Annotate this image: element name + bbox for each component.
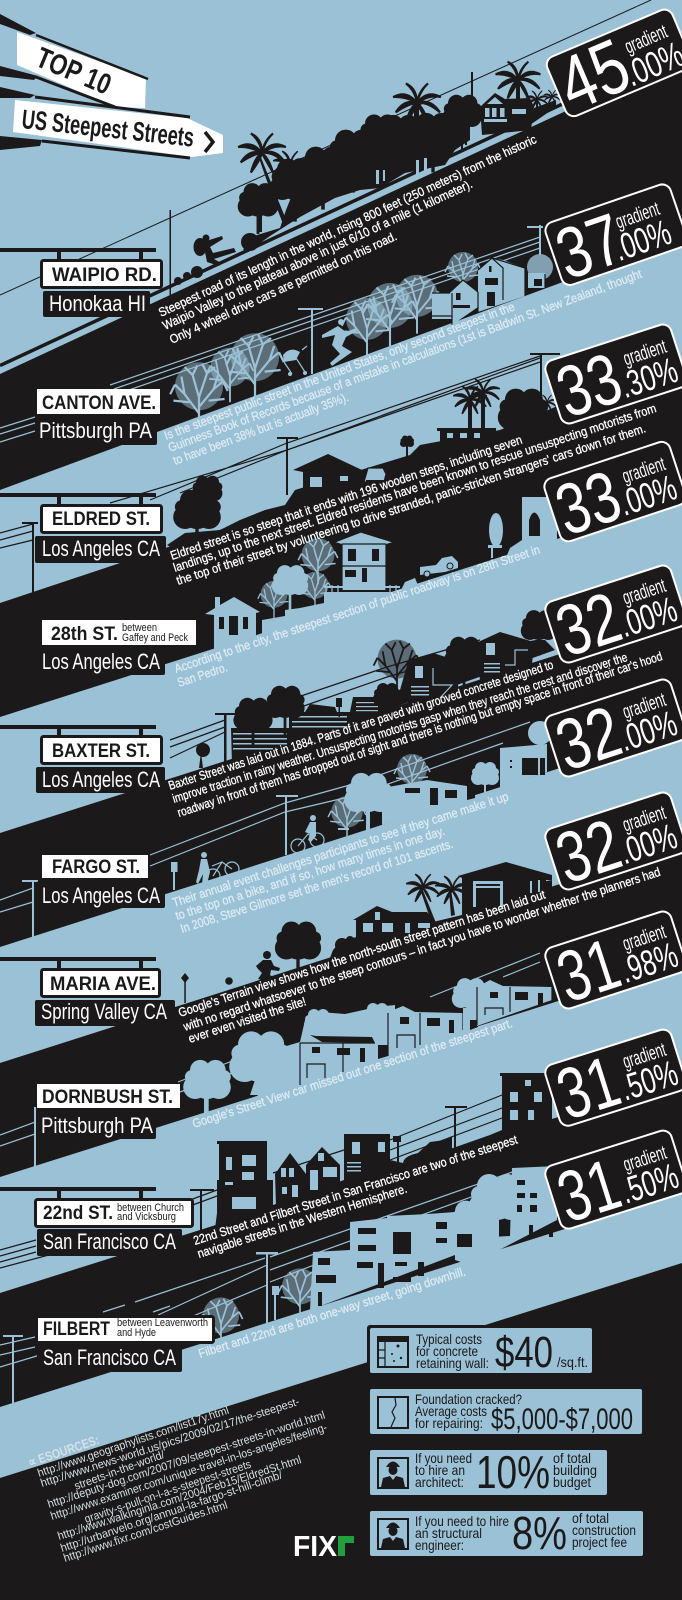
cost box: structural engineer: of total — [572, 1510, 609, 1526]
cost box: retaining wall: for concrete — [416, 1343, 478, 1359]
icon: blue houses — [432, 258, 545, 325]
sign: 28th St: Gaffey and Peck — [122, 632, 188, 644]
sign: Baxter St: BAXTER ST. — [52, 741, 150, 762]
sign: 28th St — [38, 620, 196, 675]
icon: hillside house right — [476, 632, 534, 690]
resources list — [26, 1396, 329, 1565]
text: Filbert description: Filbert and 22nd are both one-way street, going downhill. — [197, 1265, 467, 1361]
scene: Dornbush St tree-lined houses — [0, 953, 552, 1167]
cost box: retaining wall: /sq.ft. — [557, 1354, 588, 1370]
sign: 22nd St: between Church — [117, 1202, 184, 1214]
text: Eldred description: Eldred street is so steep that it ends with 196 wooden steps, including seven — [169, 433, 524, 563]
resources list: http://urbanvelo.org/annual-la-fargo-st-hill-climb/ — [59, 1469, 285, 1555]
band: footer black slope — [0, 1263, 682, 1600]
logo: Fixr: FIX — [293, 1531, 338, 1563]
badge: 33.00% gradient — [541, 436, 682, 553]
title sign: US Steepest Streets: US Steepest Streets — [20, 104, 196, 153]
text: 22nd St description: navigable streets in the Western Hemisphere. — [196, 1182, 409, 1261]
badge: 33.00% gradient: 33 — [546, 456, 630, 551]
icon: Dornbush house one — [300, 1035, 375, 1088]
text: Baxter description: Baxter Street was laid out in 1884. Parts of it are paved with grooved concrete designed to — [167, 658, 555, 793]
sign: 28th St: between — [122, 622, 157, 634]
text: Maria description: Google's Terrain view shows how the north-south street pattern has been laid out — [177, 887, 548, 1020]
scene: Eldred St trees, poles, houses and car — [0, 353, 560, 594]
icon: running child — [256, 951, 280, 983]
cost box: architect: to hire an — [415, 1462, 465, 1478]
sign: Waipio Rd — [0, 248, 162, 317]
icon: cyclist riding — [291, 815, 324, 853]
badge: 31.50% gradient for 22nd: 31 — [548, 1144, 630, 1238]
icon: cracked foundation — [378, 1397, 408, 1428]
cost box: retaining wall: retaining wall: — [416, 1355, 489, 1371]
sign: Filbert: between Leavenworth — [117, 1317, 208, 1329]
cost box: architect: building — [553, 1462, 597, 1478]
sign: Eldred St — [0, 493, 166, 563]
band: Waipio and Canton black slope — [0, 57, 682, 490]
sign: Maria Ave — [0, 957, 175, 1026]
sign: Fargo St: Los Angeles CA — [42, 883, 160, 908]
text: Waipio description: Steepest road of its length in the world, rising 800 feet (250 meters) from the historic — [156, 132, 539, 320]
sign: Waipio Rd: WAIPIO RD. — [52, 265, 157, 286]
badge: 31.50% gradient for 22nd — [542, 1124, 682, 1240]
icon: flat-roof house — [437, 428, 496, 449]
text: 22nd St description: 22nd Street and Filbert Street in San Francisco are two of the steepest — [192, 1132, 520, 1248]
sign: Baxter St — [0, 725, 165, 793]
badge: 31.50% gradient for Dornbush: 31 — [548, 1041, 629, 1135]
sign: Filbert — [36, 1316, 214, 1372]
badge: 33.30% gradient: 33 — [547, 338, 631, 433]
title sign: TOP 10 — [0, 14, 148, 108]
title sign: US Steepest Streets — [0, 87, 223, 158]
sign: Baxter St: Los Angeles CA — [42, 767, 160, 792]
sign: Waipio Rd: Honokaa HI — [49, 291, 146, 316]
icon: hiker — [194, 234, 236, 266]
icon: Victorian building — [217, 1141, 273, 1214]
scene: 22nd St Victorian row houses and car — [0, 1073, 552, 1268]
icon: engineer — [378, 1519, 408, 1549]
cost box: structural engineer — [370, 1507, 643, 1559]
sign: Filbert: FILBERT — [43, 1319, 110, 1340]
icon: flat house — [344, 1134, 390, 1176]
text: 28th St description: San Pedro. — [176, 660, 229, 690]
icon: tall house — [500, 1073, 552, 1138]
sign: 22nd St: San Francisco CA — [43, 1229, 176, 1254]
text: Dornbush description: Google's Street View car missed out one section of the steepest part. — [191, 1016, 514, 1131]
text: Fargo description: In 2008, Steve Gilmore set the men's record of 101 ascents. — [179, 837, 455, 936]
resources list: http://www.fixr.com/costGuides.html — [62, 1499, 229, 1565]
cost box: architect: budget — [553, 1474, 591, 1490]
text: Waipio description: Waipio Valley to the plateau above in just 6/10 of a mile (1 kilometer). — [160, 177, 475, 333]
cost box: structural engineer: 8% — [512, 1507, 567, 1559]
cost box: architect: 10% — [476, 1446, 550, 1498]
cost box: structural engineer: If you need to hire — [415, 1513, 509, 1529]
scene: Filbert St wires, trees and row of buildings — [0, 1166, 557, 1403]
scene: Waipio road with hiker, palms and house — [0, 0, 682, 371]
badge: 32.00% gradient for Fargo: 32 — [547, 804, 631, 900]
icon: retaining wall — [378, 1337, 408, 1367]
title sign: TOP 10: TOP 10 — [31, 42, 116, 101]
icon: Dornbush house three — [477, 980, 552, 1026]
icon: stroller — [283, 346, 307, 376]
sign: Filbert: San Francisco CA — [43, 1345, 176, 1370]
badge: 32.00% gradient for Fargo — [541, 785, 682, 901]
sign: Canton Ave: CANTON AVE. — [42, 393, 156, 414]
icon: Fargo houses — [388, 758, 545, 805]
text: Waipio description: Only 4 wheel drive cars are permitted on this road. — [167, 229, 399, 347]
badge: 32.00% gradient for Baxter: 32 — [547, 691, 631, 787]
sign: Maria Ave: Spring Valley CA — [41, 999, 167, 1024]
cost box: retaining wall: Typical costs — [416, 1331, 482, 1347]
sign: Dornbush St: DORNBUSH ST. — [42, 1087, 173, 1108]
cost box: foundation: for repairing: — [415, 1415, 483, 1431]
resources list: http://www.geographylists.com/list17y.html — [36, 1405, 231, 1480]
sign: Canton Ave — [37, 389, 160, 445]
resources list: http://www.news-world.us/pics/2009/02/17/the-steepest- — [39, 1396, 301, 1490]
band: 22nd and Filbert black slope — [0, 1078, 682, 1407]
icon: architect — [378, 1458, 408, 1488]
badge: 31.98% gradient — [541, 904, 682, 1020]
cost box: architect: architect: — [415, 1474, 464, 1490]
badge: 45.00% gradient — [540, 0, 682, 130]
scene: 28th St houses, trees and truck — [205, 497, 557, 660]
text: Maria description: ever even visited the site! — [187, 994, 308, 1046]
sign: 22nd St: and Vicksburg — [117, 1211, 176, 1223]
sign: Dornbush St: Pittsburgh PA — [41, 1113, 153, 1138]
badge: 33.30% gradient — [542, 318, 682, 435]
sign: Maria Ave: MARIA AVE. — [50, 974, 156, 995]
icon: Dornbush house two — [388, 1006, 463, 1058]
resources list: http://www.examiner.com/unique-travel-in-los-angeles/feeling- — [49, 1422, 329, 1523]
scene: Canton Ave trees, stroller, runner and houses — [0, 225, 553, 442]
sign: Fargo St — [37, 855, 165, 908]
icon: sports car — [403, 1136, 452, 1163]
badge: 32.00% gradient for 28th — [541, 558, 682, 674]
icon: pickup truck — [420, 556, 458, 577]
resources list: http://www.walkinginla.com/2004/Feb15/EldredSt.html — [56, 1454, 303, 1543]
badge: 31.98% gradient: 31 — [548, 924, 630, 1018]
cost box: structural engineer: project fee — [572, 1534, 627, 1550]
sign: Fargo St: FARGO ST. — [52, 857, 140, 878]
sign: 28th St: 28th ST. — [51, 624, 118, 645]
badge: 37.00% gradient — [542, 178, 682, 297]
band: Eldred and 28th black slope — [0, 376, 682, 717]
icon: runner — [322, 319, 357, 366]
cost box: retaining wall: $40 — [495, 1328, 553, 1377]
resources list: http://deputy-dog.com/2007/09/steepest-streets-in-world.html — [46, 1410, 327, 1511]
sign: 28th St: Los Angeles CA — [42, 649, 160, 674]
badge: 32.00% gradient for 28th: 32 — [547, 577, 631, 673]
icon: cyclist walking bike — [196, 852, 239, 884]
icon: Maria house left — [353, 906, 433, 940]
sign: Eldred St: Los Angeles CA — [42, 536, 160, 561]
cost box: structural engineer: construction — [572, 1522, 636, 1538]
cost box: architect — [370, 1446, 607, 1498]
sign: 22nd St — [0, 1187, 192, 1256]
cost box: retaining wall — [367, 1325, 596, 1377]
sign: 22nd St: 22nd ST. — [43, 1203, 113, 1224]
icon: two-storey house — [335, 532, 393, 590]
badge: 32.00% gradient for Baxter — [541, 672, 682, 788]
icon: craftsman house — [293, 454, 362, 497]
scene: Baxter St stairs, houses and trees — [170, 610, 557, 768]
resources list: ∝ ESOURCES: — [26, 1432, 101, 1470]
badge: 31.50% gradient for Dornbush — [541, 1022, 682, 1138]
text: Fargo description: to the top on a bike, and if so, how many times in one day. — [174, 824, 447, 923]
badge: 37.00% gradient: 37 — [546, 199, 633, 295]
icon: bay-window windows — [316, 1180, 553, 1306]
cost box: foundation: Average costs — [415, 1403, 487, 1419]
band: Baxter and Fargo black slope — [0, 615, 682, 947]
resources list: streets-in-the-world/ — [73, 1449, 167, 1493]
icon: fence — [324, 585, 400, 592]
icon: hillside house left — [406, 653, 462, 712]
text: 28th St description: According to the city, the steepest section of public roadway is on 28th Street in — [173, 543, 542, 676]
text: Canton description: Is the steepest public street in the United States, only second steepest in the — [162, 300, 517, 443]
icon: Maria garage house — [458, 862, 552, 915]
sign: Canton Ave: Pittsburgh PA — [39, 418, 152, 443]
scene: Maria Ave child, tree, palms and houses — [181, 862, 552, 1003]
icon: gabled house — [275, 1153, 306, 1207]
sign: Eldred St: ELDRED ST. — [52, 509, 150, 530]
scene: Fargo St cyclists, poles and houses — [0, 721, 552, 938]
sign: Dornbush St — [37, 1084, 180, 1139]
band: Maria and Dornbush black slope — [0, 845, 682, 1177]
icon: cottage — [205, 597, 260, 660]
cost box: structural engineer: engineer: — [415, 1537, 464, 1553]
text: Fargo description: Their annual event challenges participants to see if they came make it up — [171, 789, 510, 910]
text: Canton description: to have been 38% but is actually 35%). — [171, 390, 350, 468]
resources list: gravity-s-pull-on-l-a-s-steepest-streets — [83, 1459, 253, 1526]
cost box: foundation — [370, 1389, 642, 1436]
cost box: architect: of total — [553, 1450, 591, 1466]
sign: Filbert: and Hyde — [117, 1327, 156, 1339]
cost box: foundation: Foundation cracked? — [415, 1391, 522, 1407]
cost box: structural engineer: an structural — [415, 1525, 482, 1541]
badge: 45.00% gradient: 45 — [546, 23, 642, 128]
icon: tall gabled house — [306, 1147, 340, 1200]
icon: parked car — [364, 468, 386, 482]
cost box: foundation: $5,000-$7,000 — [491, 1403, 633, 1436]
icon: Victorian house — [480, 93, 534, 135]
cost box: architect: If you need — [415, 1450, 472, 1466]
